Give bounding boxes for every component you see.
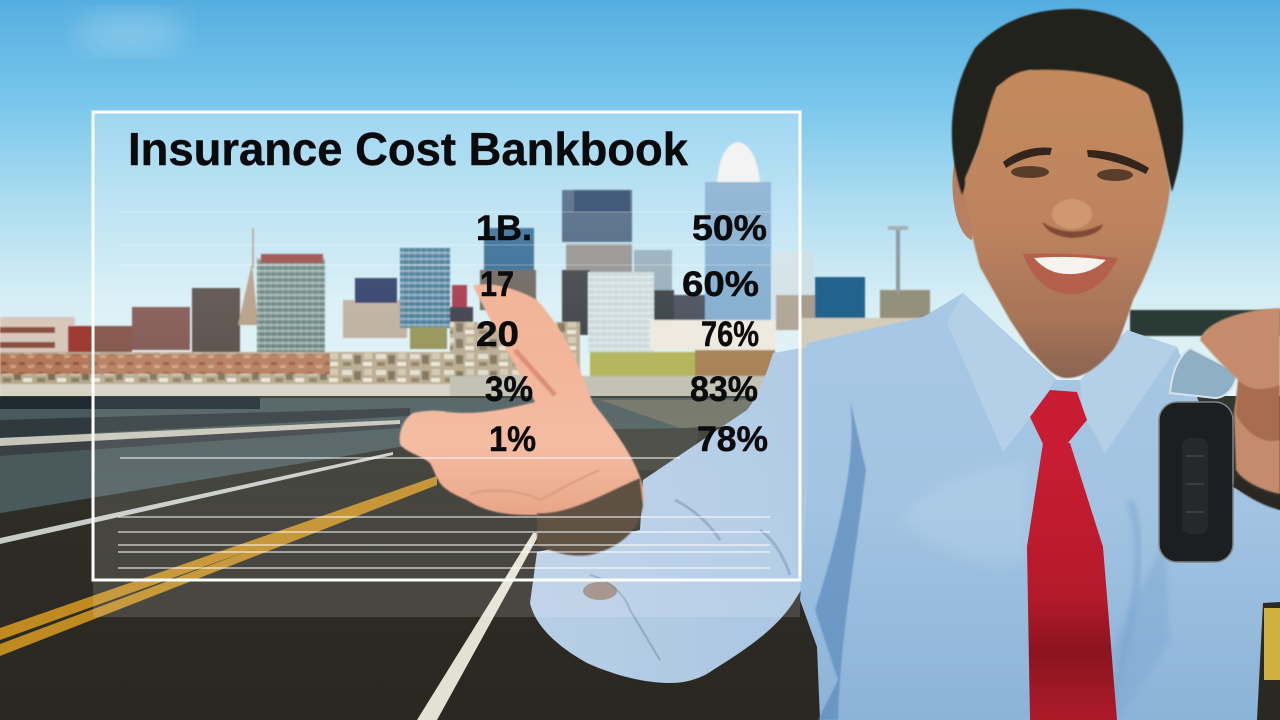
key fob bbox=[1159, 402, 1233, 562]
head bbox=[952, 9, 1183, 378]
road and roadside bbox=[0, 396, 1280, 720]
title: Insurance Cost Bankbook bbox=[128, 123, 688, 175]
eyes bbox=[1011, 166, 1133, 181]
right value column: 83% bbox=[690, 370, 758, 409]
hair bbox=[952, 9, 1183, 195]
right value column bbox=[682, 209, 768, 459]
shirt torso bbox=[800, 293, 1280, 720]
left value column bbox=[476, 209, 536, 459]
face bbox=[965, 70, 1170, 378]
left value column: 1% bbox=[489, 420, 536, 459]
road markings bbox=[0, 452, 540, 720]
left collar bbox=[947, 293, 1055, 452]
right collar bbox=[1080, 330, 1177, 453]
necktie bbox=[1027, 390, 1117, 720]
glass panel bbox=[93, 112, 800, 617]
outstretched hand bbox=[400, 284, 644, 556]
man bbox=[530, 9, 1280, 720]
key ring bbox=[1170, 348, 1237, 398]
right value column: 50% bbox=[692, 209, 767, 248]
left value column: 17 bbox=[480, 265, 514, 304]
extended sleeve bbox=[530, 343, 880, 683]
right value column: 76% bbox=[701, 315, 759, 354]
raised hand with car key bbox=[1159, 308, 1280, 562]
left value column: 20 bbox=[476, 315, 519, 354]
cuff button bbox=[583, 582, 617, 600]
smile bbox=[1023, 254, 1118, 294]
fingers bbox=[1200, 308, 1280, 510]
left value column: 3% bbox=[485, 370, 533, 409]
ear bbox=[952, 160, 980, 240]
right value column: 60% bbox=[682, 265, 759, 304]
sky background bbox=[0, 0, 1280, 400]
city skyline bbox=[0, 142, 1280, 398]
right value column: 78% bbox=[697, 420, 768, 459]
nose bbox=[1042, 199, 1103, 238]
left value column: 1B. bbox=[476, 209, 532, 248]
brows bbox=[1003, 148, 1149, 174]
